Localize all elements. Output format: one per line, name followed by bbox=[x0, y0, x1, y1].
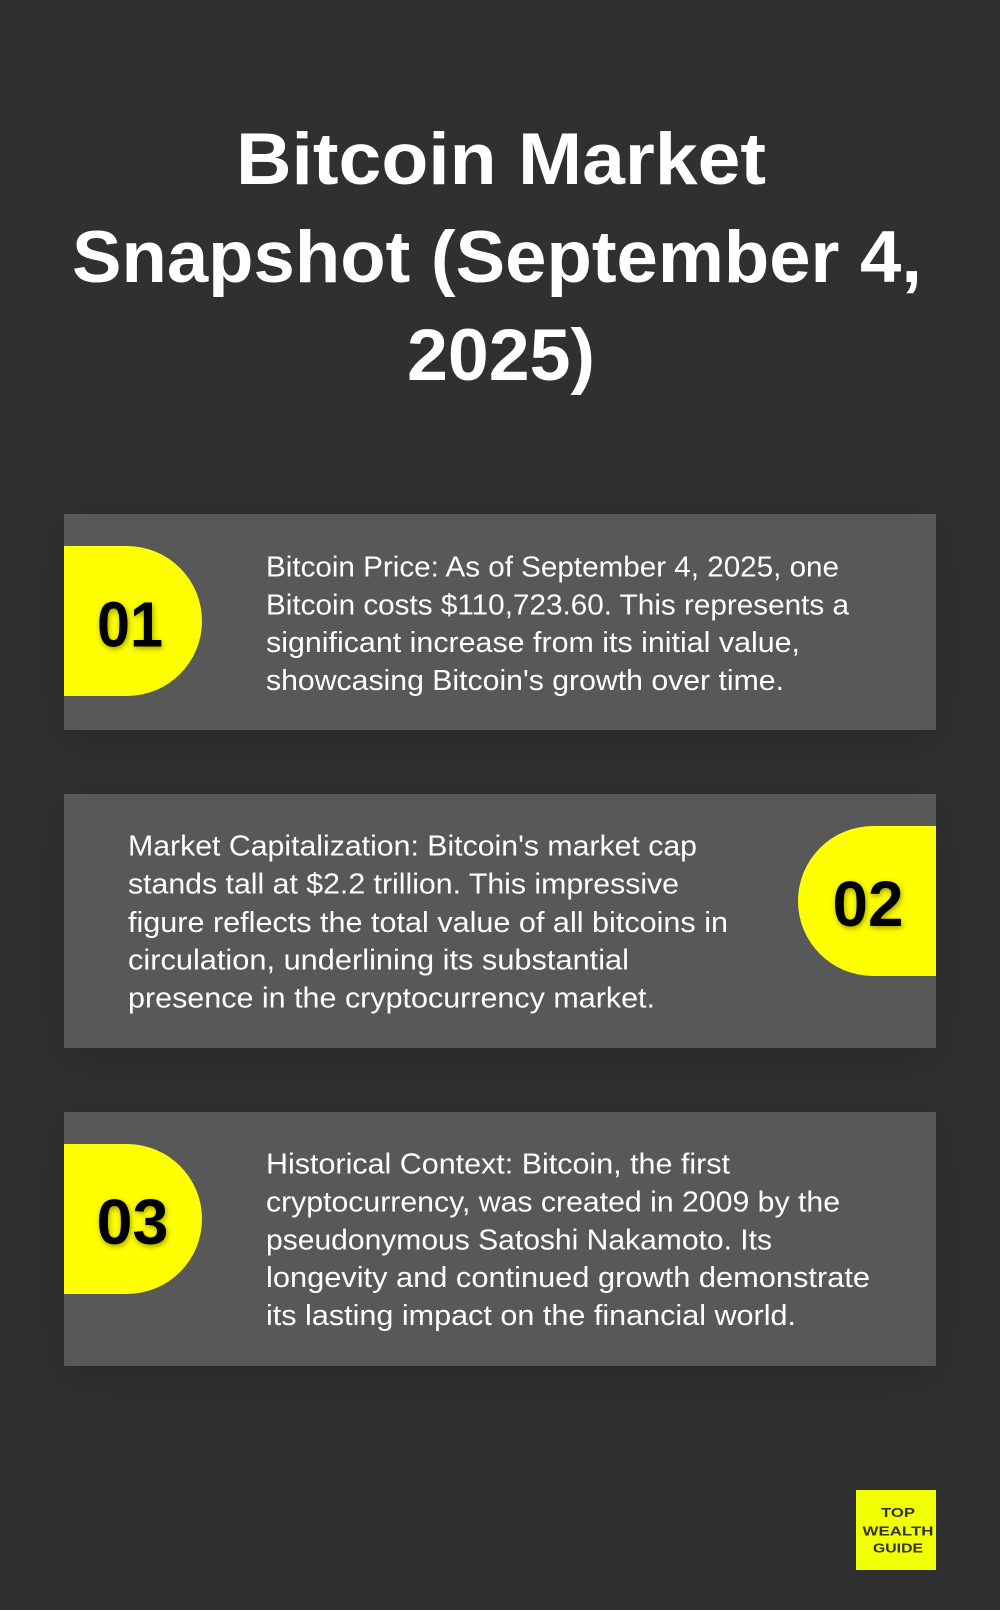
text: bitcoin price: significant increase from its initial value, bbox=[266, 627, 800, 659]
logo: top wealth guide: WEALTH bbox=[862, 1524, 934, 1538]
text: market capitalization: Market Capitalization: Bitcoin's market cap bbox=[128, 830, 697, 862]
text: bitcoin price: Bitcoin costs $110,723.60. This represents a bbox=[266, 590, 849, 622]
text: historical context: pseudonymous Satoshi Nakamoto. Its bbox=[266, 1224, 772, 1256]
panel: market capitalization bbox=[64, 794, 936, 1048]
logo: top wealth guide bbox=[856, 1490, 936, 1570]
number badge 03: 03 bbox=[96, 1186, 168, 1258]
number badge 03 bbox=[64, 1144, 202, 1294]
logo: top wealth guide: TOP bbox=[881, 1506, 915, 1520]
text: historical context: its lasting impact on the financial world. bbox=[266, 1300, 796, 1332]
text: bitcoin price: showcasing Bitcoin's growth over time. bbox=[266, 665, 784, 697]
text: market capitalization: presence in the cryptocurrency market. bbox=[128, 982, 655, 1014]
logo: top wealth guide: GUIDE bbox=[873, 1542, 923, 1556]
text: market capitalization bbox=[128, 830, 728, 1014]
text: market capitalization: circulation, underlining its substantial bbox=[128, 944, 629, 976]
number badge 02 bbox=[798, 826, 936, 976]
text: bitcoin price bbox=[266, 552, 849, 697]
title: 2025) bbox=[407, 315, 595, 396]
number badge 01: 01 bbox=[97, 588, 163, 660]
text: market capitalization: figure reflects the total value of all bitcoins in bbox=[128, 907, 728, 939]
text: market capitalization: stands tall at $2.2 trillion. This impressive bbox=[128, 868, 679, 900]
text: bitcoin price: Bitcoin Price: As of September 4, 2025, one bbox=[266, 552, 839, 584]
title: Bitcoin Market bbox=[236, 119, 766, 200]
title bbox=[72, 119, 922, 396]
card background 1 bbox=[64, 514, 936, 730]
text: historical context: Historical Context: Bitcoin, the first bbox=[266, 1148, 730, 1180]
card background 2 bbox=[64, 794, 936, 1048]
text: historical context: cryptocurrency, was created in 2009 by the bbox=[266, 1186, 840, 1218]
text: historical context: longevity and continued growth demonstrate bbox=[266, 1262, 870, 1294]
title: Snapshot (September 4, bbox=[72, 217, 922, 298]
card background 3 bbox=[64, 1112, 936, 1366]
panel: historical context bbox=[64, 1112, 936, 1366]
number badge 01 bbox=[64, 546, 202, 696]
panel: bitcoin price bbox=[64, 514, 936, 730]
number badge 02: 02 bbox=[832, 868, 904, 940]
text: historical context bbox=[266, 1148, 870, 1332]
